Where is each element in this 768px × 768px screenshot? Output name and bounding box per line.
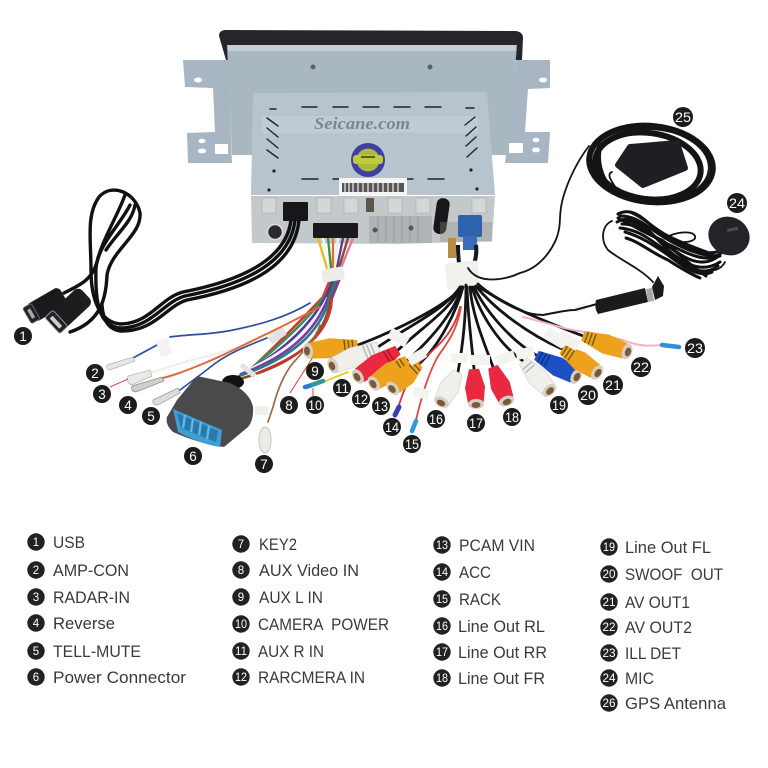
left mounting bracket bbox=[183, 60, 232, 163]
key2 brown wire bbox=[268, 325, 320, 422]
radar-in white wire bbox=[150, 335, 273, 373]
tell-mute blue wire bbox=[180, 338, 267, 390]
harness side sleeve bbox=[267, 326, 287, 344]
single wires to 2 3 4 5 bbox=[106, 303, 320, 422]
callout 16 bbox=[427, 410, 445, 428]
legend AV OUT2: AV OUT2 bbox=[625, 619, 692, 637]
right mounting bracket bbox=[505, 60, 550, 163]
android sticker bbox=[351, 143, 385, 177]
callout 11 bbox=[333, 379, 351, 397]
rear harness collar tag bbox=[445, 260, 480, 290]
callout 16: 16 bbox=[429, 412, 443, 427]
callout 2 bbox=[86, 364, 104, 382]
legend CAMERA POWER: 10 bbox=[235, 619, 247, 631]
barcode sticker bbox=[339, 178, 407, 195]
main harness colored wires bbox=[239, 238, 353, 378]
legend Power Connector: Power Connector bbox=[53, 669, 187, 687]
chassis back panel bbox=[227, 45, 517, 155]
plug white 19 bbox=[516, 355, 560, 401]
callout 17: 17 bbox=[469, 416, 483, 431]
legend Power Connector: 6 bbox=[33, 672, 39, 684]
dark front bezel bbox=[219, 30, 523, 60]
callout 22 bbox=[631, 357, 651, 377]
callout 8 bbox=[280, 396, 298, 414]
GPS antenna puck bbox=[618, 143, 685, 185]
legend AV OUT2: 22 bbox=[602, 622, 616, 634]
amp-con terminal bbox=[106, 357, 135, 370]
callout 13: 13 bbox=[374, 399, 388, 414]
legend Line Out FL: Line Out FL bbox=[625, 539, 711, 557]
callout 10 bbox=[306, 396, 324, 414]
callout 25 bbox=[673, 107, 693, 127]
callout 12: 12 bbox=[354, 392, 368, 407]
legend AUX R IN bbox=[232, 642, 324, 661]
legend AV OUT1: AV OUT1 bbox=[625, 594, 690, 612]
legend ILL DET bbox=[600, 644, 681, 663]
reverse orange wire bbox=[163, 307, 320, 378]
VGA connector and antenna stub bbox=[433, 197, 492, 278]
callout 13 bbox=[372, 397, 390, 415]
blue plug interior bbox=[177, 413, 218, 442]
legend column 4 bbox=[600, 538, 727, 713]
legend KEY2 bbox=[232, 535, 297, 554]
foam sleeve bbox=[167, 376, 253, 447]
callout 12 bbox=[352, 390, 370, 408]
legend PCAM VIN: PCAM VIN bbox=[459, 537, 535, 555]
legend USB: USB bbox=[53, 534, 85, 552]
legend RACK: 15 bbox=[436, 594, 448, 606]
radar-in terminal bbox=[128, 370, 152, 385]
callout 14: 14 bbox=[385, 420, 399, 435]
callout 10: 10 bbox=[308, 398, 322, 413]
bracket holes bbox=[194, 78, 547, 154]
legend Line Out FR: Line Out FR bbox=[458, 670, 545, 688]
leader lines bbox=[110, 357, 313, 396]
callout 14 bbox=[383, 418, 401, 436]
microphone cable bundle bbox=[617, 212, 725, 278]
legend CAMERA POWER: CAMERA POWER bbox=[258, 616, 389, 634]
legend AUX Video IN: AUX Video IN bbox=[259, 562, 359, 580]
callout 3 bbox=[93, 385, 111, 403]
power connector bbox=[167, 363, 257, 447]
callout 19: 19 bbox=[552, 398, 566, 413]
plug orange 21 bbox=[557, 341, 607, 384]
small tag by key2 bbox=[255, 406, 268, 415]
callout 9 bbox=[306, 362, 324, 380]
legend KEY2: KEY2 bbox=[259, 536, 297, 554]
brand watermark: Seicane.com bbox=[314, 114, 410, 133]
legend RADAR-IN: 3 bbox=[33, 592, 39, 604]
blue plug face bbox=[173, 409, 222, 447]
plug orange 13 bbox=[382, 357, 426, 399]
callout 3: 3 bbox=[98, 387, 106, 402]
callout 22: 22 bbox=[633, 360, 649, 375]
legend USB: 1 bbox=[33, 537, 39, 549]
GPS antenna cable bbox=[468, 146, 589, 280]
plug orange 9 bbox=[302, 335, 359, 361]
callout 4: 4 bbox=[124, 398, 132, 413]
legend AV OUT1 bbox=[600, 593, 690, 612]
legend ILL DET: ILL DET bbox=[625, 645, 681, 663]
legend Reverse bbox=[27, 614, 115, 633]
callout 23: 23 bbox=[687, 341, 703, 356]
legend AMP-CON: AMP-CON bbox=[53, 562, 129, 580]
head unit rear view bbox=[183, 30, 550, 244]
legend RACK bbox=[433, 590, 501, 609]
KEY2 terminal bbox=[259, 427, 271, 453]
plug white 11 bbox=[324, 338, 382, 377]
harness connector block bbox=[313, 223, 358, 238]
callout 1: 1 bbox=[19, 329, 27, 344]
callout 25: 25 bbox=[675, 110, 691, 125]
USB connector left bbox=[22, 286, 68, 325]
callout 24: 24 bbox=[729, 196, 746, 211]
callout 18 bbox=[503, 408, 521, 426]
legend RARCMERA IN: 12 bbox=[235, 672, 247, 684]
callout 4 bbox=[119, 396, 137, 414]
plug orange 12b bbox=[364, 352, 413, 395]
legend AUX L IN: AUX L IN bbox=[259, 589, 323, 607]
legend GPS Antenna: 26 bbox=[602, 698, 616, 710]
callout 1 bbox=[14, 327, 32, 345]
legend PCAM VIN bbox=[433, 536, 535, 555]
harness cable tag bbox=[321, 266, 345, 283]
legend RACK: RACK bbox=[459, 591, 501, 609]
callout 15: 15 bbox=[405, 437, 419, 452]
plug red 18 bbox=[484, 363, 518, 409]
callout 6 bbox=[184, 447, 202, 465]
legend AUX R IN: AUX R IN bbox=[258, 643, 324, 661]
yellow aux video wire bbox=[305, 372, 348, 387]
legend AMP-CON: 2 bbox=[33, 565, 39, 577]
callout 5: 5 bbox=[147, 409, 155, 424]
reverse terminal bbox=[132, 377, 164, 392]
legend AUX L IN bbox=[232, 588, 323, 607]
legend column 2 bbox=[232, 535, 389, 687]
callout 7 bbox=[255, 455, 273, 473]
legend Line Out RL: 16 bbox=[436, 621, 448, 633]
microphone head bbox=[702, 210, 756, 262]
plug orange 22 bbox=[579, 326, 635, 363]
amp-con sleeve label bbox=[156, 338, 172, 357]
legend column 1 bbox=[27, 533, 187, 687]
vent slots bbox=[267, 107, 477, 179]
legend RARCMERA IN: RARCMERA IN bbox=[258, 669, 365, 687]
plug blue 20 bbox=[532, 346, 585, 388]
callout 9: 9 bbox=[311, 364, 319, 379]
ill det pink wire bbox=[523, 317, 679, 347]
RCA plugs bbox=[302, 326, 635, 411]
callout 19 bbox=[550, 396, 568, 414]
round socket bbox=[268, 224, 282, 240]
legend AV OUT1: 21 bbox=[602, 597, 616, 609]
legend MIC: MIC bbox=[625, 670, 654, 688]
rear connector plate bbox=[251, 196, 495, 244]
legend GPS Antenna: GPS Antenna bbox=[625, 695, 727, 713]
legend Line Out FR: 18 bbox=[436, 673, 448, 685]
callout numbers on photo bbox=[14, 107, 747, 473]
legend Line Out RR: Line Out RR bbox=[458, 644, 547, 662]
legend MIC bbox=[600, 669, 654, 688]
top cover plate bbox=[251, 92, 495, 195]
legend USB bbox=[27, 533, 85, 552]
legend PCAM VIN: 13 bbox=[436, 540, 448, 552]
legend SWOOF OUT: 20 bbox=[602, 569, 616, 581]
legend RADAR-IN: RADAR-IN bbox=[53, 589, 130, 607]
callout 23 bbox=[685, 338, 705, 358]
plug red 17 bbox=[464, 368, 486, 410]
callout 15 bbox=[403, 435, 421, 453]
legend TELL-MUTE: TELL-MUTE bbox=[53, 643, 141, 661]
callout 17 bbox=[467, 414, 485, 432]
acc and rack red wires bbox=[395, 307, 461, 431]
callout 2: 2 bbox=[91, 366, 99, 381]
legend Reverse: 4 bbox=[33, 618, 40, 630]
cable tie bbox=[240, 363, 257, 378]
tell-mute terminal bbox=[153, 388, 180, 405]
legend AUX R IN: 11 bbox=[235, 646, 247, 658]
legend MIC: 24 bbox=[602, 673, 616, 685]
legend TELL-MUTE: 5 bbox=[33, 646, 39, 658]
legend AV OUT2 bbox=[600, 618, 692, 637]
cover watermark band bbox=[262, 116, 478, 133]
callout 11: 11 bbox=[335, 381, 349, 396]
callout 21 bbox=[603, 375, 623, 395]
callout 20: 20 bbox=[580, 388, 596, 403]
callout 7: 7 bbox=[260, 457, 268, 472]
legend KEY2: 7 bbox=[238, 539, 244, 551]
callout 21: 21 bbox=[605, 378, 621, 393]
GPS cable coil bbox=[585, 120, 717, 208]
legend Line Out FL: 19 bbox=[603, 542, 615, 554]
callout 20 bbox=[578, 385, 598, 405]
legend AUX Video IN: 8 bbox=[238, 565, 244, 577]
amp-con wire bbox=[133, 303, 310, 358]
legend Line Out RR: 17 bbox=[436, 647, 448, 659]
USB cable bundle bbox=[64, 190, 299, 332]
black fan wires bbox=[358, 284, 583, 372]
microphone jack and cable bbox=[478, 221, 664, 315]
callout 24 bbox=[727, 193, 747, 213]
legend ILL DET: 23 bbox=[602, 648, 616, 660]
legend Reverse: Reverse bbox=[53, 615, 115, 633]
callout 5 bbox=[142, 407, 160, 425]
callout 6: 6 bbox=[189, 449, 197, 464]
plug red 12 bbox=[348, 342, 403, 388]
callout 18: 18 bbox=[505, 410, 519, 425]
black cable plug bbox=[283, 202, 308, 221]
plug white 16 bbox=[430, 367, 467, 411]
legend Line Out RL: Line Out RL bbox=[458, 618, 545, 636]
wire sleeve labels bbox=[387, 303, 588, 400]
legend column 3 bbox=[433, 536, 547, 688]
legend ACC: ACC bbox=[459, 564, 491, 582]
USB connector right bbox=[45, 286, 93, 334]
connector neck bbox=[222, 375, 244, 389]
legend AUX L IN: 9 bbox=[238, 592, 244, 604]
legend SWOOF OUT: SWOOF OUT bbox=[625, 566, 723, 584]
legend ACC: 14 bbox=[436, 567, 449, 579]
callout 8: 8 bbox=[285, 398, 293, 413]
legend ACC bbox=[433, 563, 491, 582]
